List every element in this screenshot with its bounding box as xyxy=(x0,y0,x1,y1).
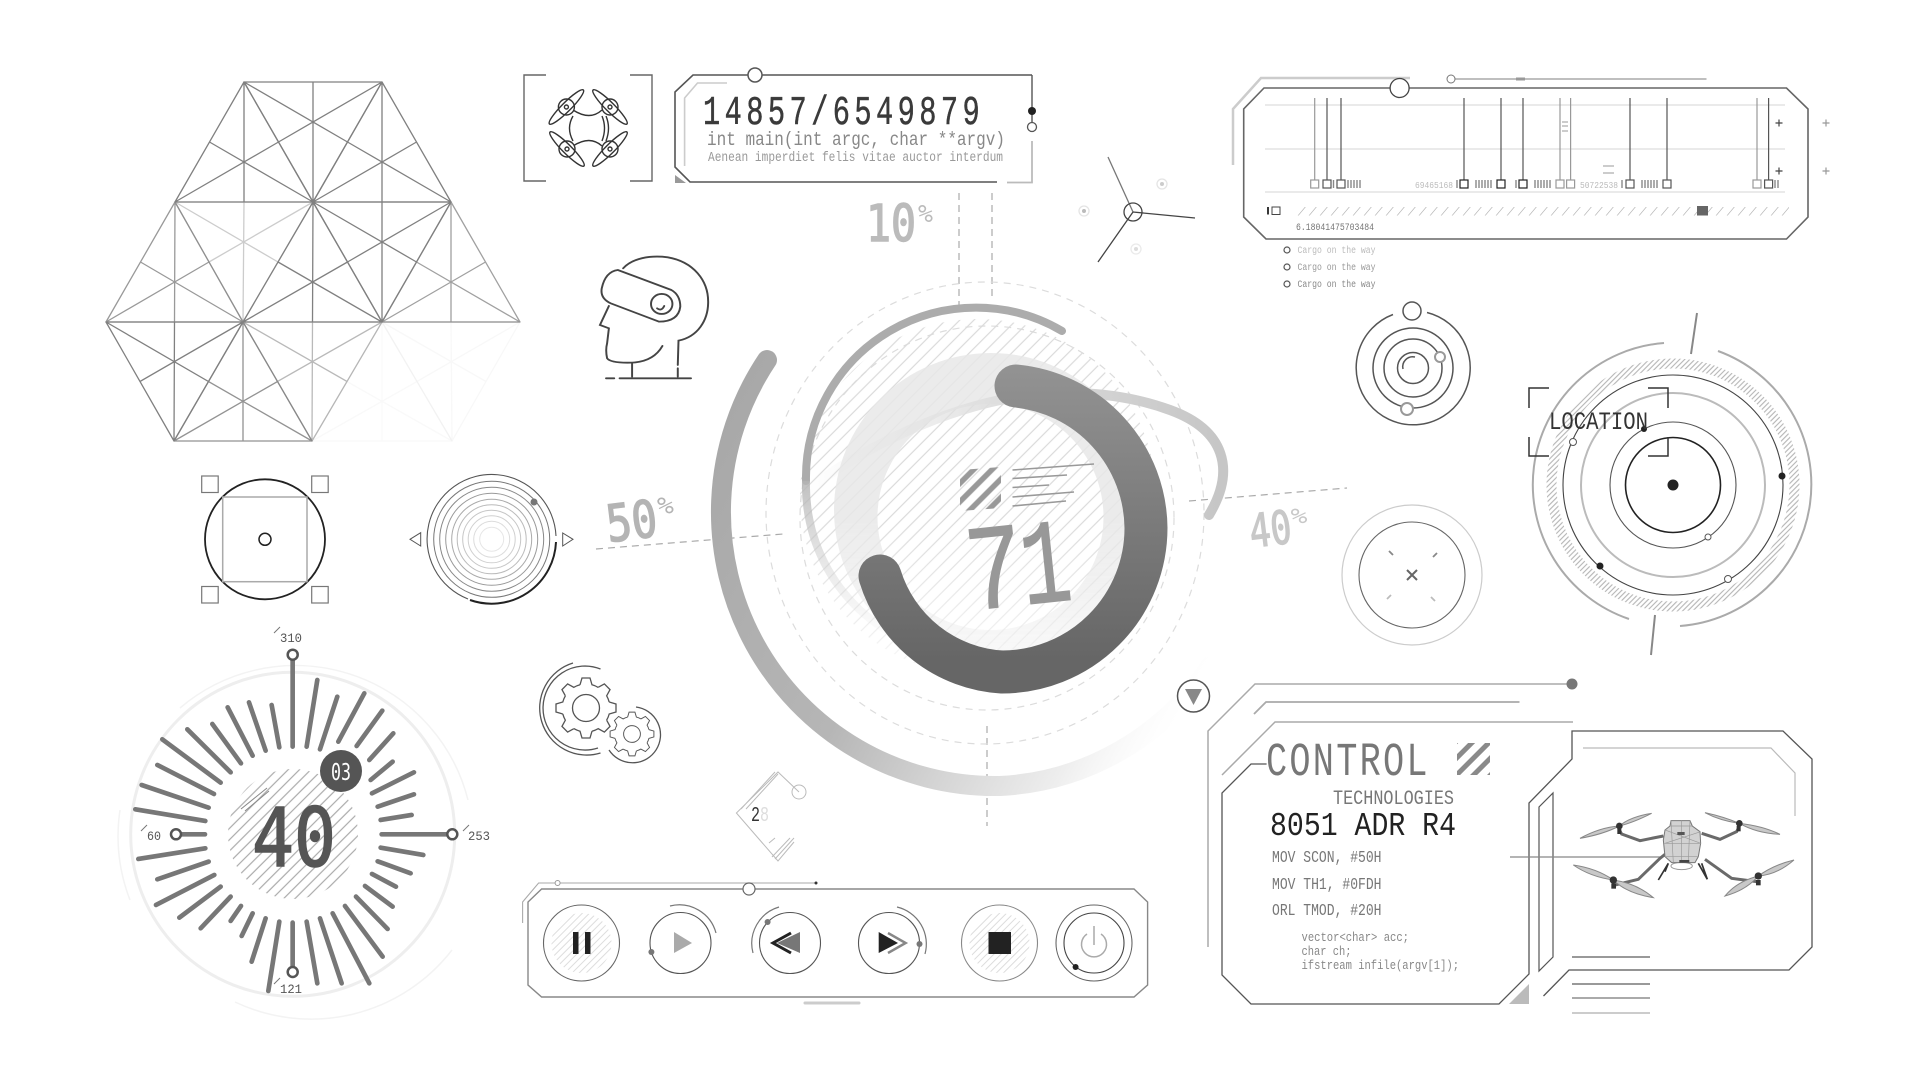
gauge labels: 253 xyxy=(468,829,490,844)
text lines icon xyxy=(1012,464,1094,506)
subtitle: TECHNOLOGIES xyxy=(1333,788,1454,811)
icon: rotor xyxy=(1079,157,1195,262)
hatched icon xyxy=(960,467,1001,511)
button: stop xyxy=(962,905,1038,981)
panel: media controls xyxy=(523,880,1148,1003)
gauge handles xyxy=(171,650,457,977)
label: 40 percent: % xyxy=(1290,504,1309,530)
right swoosh xyxy=(804,393,1223,515)
gauge value: 40 xyxy=(252,792,336,886)
thin arc fade xyxy=(806,481,932,650)
assembly code: MOV TH1, #0FDH xyxy=(1272,876,1382,895)
button: power xyxy=(1056,905,1132,981)
readout number: 14857/6549879 xyxy=(703,90,984,137)
status list xyxy=(1284,245,1376,291)
panel: code readout xyxy=(675,68,1036,183)
diamond counter xyxy=(736,772,806,861)
drone propellers and frame xyxy=(546,87,630,169)
counter digits: 2 xyxy=(751,805,760,828)
radar points xyxy=(1641,426,1647,432)
button: rewind xyxy=(752,907,820,974)
main frame xyxy=(1222,731,1812,1004)
c++ code: vector<char> acc; xyxy=(1302,930,1409,945)
main value: 7 xyxy=(962,500,1027,635)
icon: crosshair xyxy=(1342,505,1482,645)
status list: Cargo on the way xyxy=(1298,245,1376,257)
central radial chart xyxy=(596,193,1347,826)
gauge rings xyxy=(118,666,468,1019)
status list: Cargo on the way xyxy=(1298,279,1376,291)
bracket xyxy=(524,75,652,181)
hatch mark xyxy=(1457,743,1490,775)
assembly code: ORL TMOD, #20H xyxy=(1272,902,1382,921)
drone icon in bracket xyxy=(524,75,652,181)
dashed guides xyxy=(596,193,1347,826)
quadcopter xyxy=(1573,813,1794,898)
icon: target square xyxy=(202,476,328,603)
code line: int main(int argc, char **argv) xyxy=(707,129,1005,151)
model name: 8051 ADR R4 xyxy=(1270,808,1456,845)
barcode numbers: 69465168 xyxy=(1415,180,1453,191)
location radar xyxy=(1529,313,1811,655)
label: 10 percent: 10 xyxy=(866,195,916,254)
hatched disc xyxy=(800,319,1156,675)
coordinate value: 6.18041475703484 xyxy=(1296,223,1374,234)
control title: CONTROL xyxy=(1266,737,1430,790)
assembly code xyxy=(1272,849,1382,921)
c++ code: ifstream infile(argv[1]); xyxy=(1302,958,1459,973)
main value: 1 xyxy=(1014,501,1078,641)
barcode ticks xyxy=(1334,180,1778,188)
icon: vr headset head xyxy=(600,257,708,378)
outer frame lines xyxy=(1208,684,1572,947)
progress stripe xyxy=(1298,207,1789,216)
assembly code: MOV SCON, #50H xyxy=(1272,849,1382,868)
dashed rings xyxy=(766,282,1204,744)
icon: orbit system xyxy=(1356,302,1470,425)
icon: down arrow button xyxy=(1178,680,1210,712)
radar rings xyxy=(1533,343,1811,626)
caption line: Aenean imperdiet felis vitae auctor interdum xyxy=(708,151,1003,166)
panel: control xyxy=(1208,678,1812,1013)
hatched core xyxy=(228,769,358,899)
badge xyxy=(320,750,362,792)
status list: Cargo on the way xyxy=(1298,262,1376,274)
light crescent ring xyxy=(834,353,1124,634)
icon: concentric dial xyxy=(410,474,573,604)
icon: gears xyxy=(540,663,661,763)
gauge labels: 121 xyxy=(280,982,302,997)
radial bars xyxy=(135,657,448,991)
main value arc xyxy=(880,386,1146,672)
barcode numbers xyxy=(1415,180,1618,191)
label: 50 percent: 50 xyxy=(603,490,661,555)
label: 40 percent: 40 xyxy=(1246,500,1295,559)
label: 10 percent: % xyxy=(918,200,934,228)
radial gauge xyxy=(118,627,490,1019)
gauge labels: 60 xyxy=(147,829,161,844)
location label: LOCATION xyxy=(1549,408,1648,437)
button: fast forward xyxy=(858,907,926,974)
outer sweep arc xyxy=(721,360,1211,786)
gauge labels xyxy=(141,627,490,997)
c++ code xyxy=(1302,930,1459,973)
button: pause xyxy=(544,905,620,981)
triangular wireframe mesh xyxy=(106,82,520,441)
barcode numbers: 50722538 xyxy=(1580,180,1618,191)
location bracket xyxy=(1529,388,1668,456)
button: play xyxy=(648,905,716,974)
gauge labels: 310 xyxy=(280,631,302,646)
thin top arc xyxy=(806,308,1062,481)
main value xyxy=(962,495,1078,647)
label: 50 percent: % xyxy=(656,491,676,521)
panel: timeline xyxy=(1233,75,1830,239)
timeline markers xyxy=(1311,98,1773,188)
diamond counter: 8 xyxy=(760,805,769,828)
badge number: 03 xyxy=(331,760,351,786)
c++ code: char ch; xyxy=(1302,944,1352,959)
plus marks xyxy=(1776,120,1782,174)
